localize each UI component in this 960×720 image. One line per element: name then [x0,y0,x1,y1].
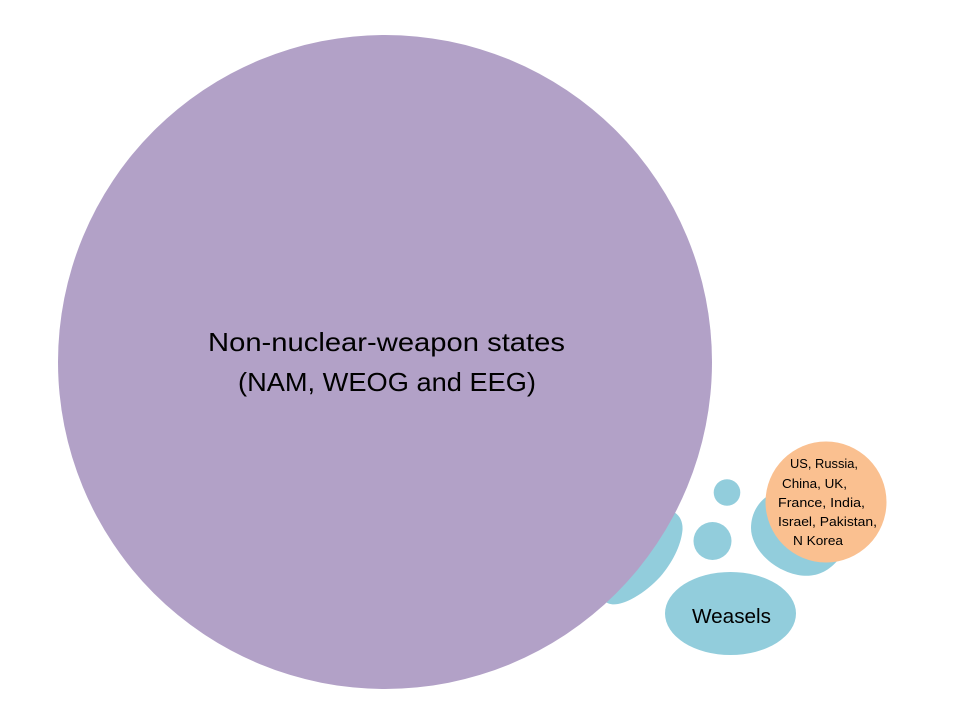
panel: nuclear-armed states circle [766,442,886,562]
small blue circle top [714,479,740,506]
label: nuclear-armed states list: US, Russia, [790,457,858,471]
label: non-nuclear-weapon states [208,327,565,397]
label: nuclear-armed states list [778,457,877,548]
panel: non-nuclear-weapon states circle [58,35,712,689]
panel: weasels ellipse [665,572,796,655]
label: non-nuclear-weapon states: (NAM, WEOG and EEG) [238,367,536,397]
label: nuclear-armed states list: China, UK, [782,477,847,491]
blue ellipse behind nuclear states circle [751,492,838,576]
label: non-nuclear-weapon states: Non-nuclear-weapon states [208,327,565,357]
label: nuclear-armed states list: France, India, [778,496,865,510]
label: nuclear-armed states list: N Korea [793,534,843,548]
medium blue circle [694,522,732,560]
label: weasels: Weasels [692,606,771,628]
blue ellipse behind purple circle [604,500,683,604]
label: nuclear-armed states list: Israel, Pakistan, [778,515,877,529]
